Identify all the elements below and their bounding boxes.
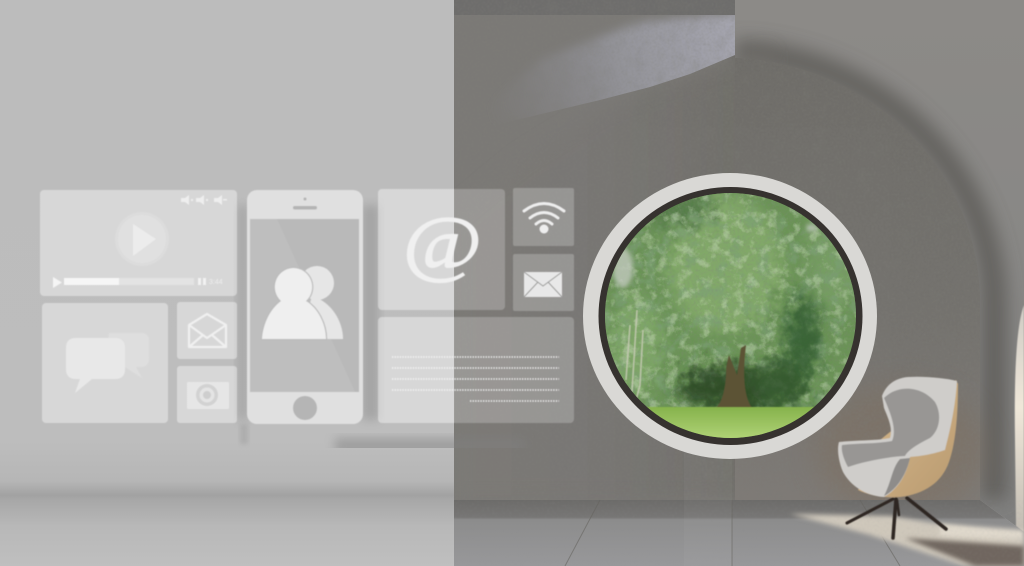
foliage dark clumps [600, 190, 862, 408]
arched wall, soft left part [684, 70, 735, 494]
bright wall strip [1015, 305, 1024, 532]
panel: chat [42, 303, 168, 423]
icon: wifi [524, 204, 564, 234]
time label: 3:44 [209, 279, 223, 286]
arched wall, crisp right part [735, 58, 980, 500]
panel: open mail [177, 302, 237, 359]
sunlight on floor [790, 514, 1024, 566]
progress bar [53, 277, 206, 288]
chair legs [847, 498, 946, 538]
garden view [600, 190, 863, 442]
panel: text block [378, 317, 574, 423]
sky gaps [613, 224, 818, 288]
chair upholstery [838, 377, 957, 497]
card shadows [236, 203, 454, 448]
panel: envelope [513, 254, 574, 311]
panel: smartphone [247, 190, 363, 424]
play button [115, 212, 169, 266]
screen reflection [250, 219, 355, 392]
window frame [598, 187, 862, 445]
chair back shadow [842, 389, 939, 467]
phone speaker [293, 198, 317, 210]
arch shadow [735, 52, 994, 500]
leaf grain [608, 200, 850, 406]
floor tile joints [565, 500, 900, 566]
panel: wifi [513, 188, 574, 246]
volume icons [181, 195, 227, 205]
icon: user group [262, 266, 343, 339]
foliage light clumps [600, 190, 862, 408]
understory shadow [676, 292, 819, 411]
panel: video player [40, 190, 237, 296]
window ring [583, 173, 877, 459]
icon: front speech bubble [66, 338, 125, 393]
phone screen [250, 219, 359, 392]
icon: camera [187, 382, 229, 409]
icon: open envelope [189, 314, 226, 347]
icon: at sign: @ [402, 202, 482, 285]
icon: back speech bubble [105, 333, 149, 378]
front user [262, 268, 326, 339]
upper wall base [454, 0, 735, 500]
floor shadow under panels [332, 435, 454, 448]
chair shell [858, 380, 958, 497]
ceiling band [454, 0, 735, 15]
foliage regions [609, 192, 863, 395]
wall grain [624, 15, 735, 86]
floor [454, 500, 1024, 566]
floor texture [454, 500, 1024, 566]
dotted text lines [392, 357, 559, 401]
home button [293, 396, 317, 420]
vaulted ceiling [735, 0, 1024, 532]
icon: closed envelope [524, 272, 562, 297]
translucent column [684, 450, 732, 566]
slender trunks [626, 310, 643, 400]
left grey overlay panel [0, 0, 454, 566]
photo: concrete room [454, 0, 1024, 566]
warm wall tint by chair [824, 401, 976, 500]
main tree trunk [716, 345, 752, 408]
armchair [838, 377, 958, 538]
back user [300, 266, 343, 339]
chair seat shadow [884, 458, 910, 496]
panel: camera [177, 366, 237, 423]
panel: email at sign [378, 189, 505, 310]
lawn [646, 406, 814, 438]
window [583, 173, 877, 459]
ceiling light patch [529, 15, 735, 113]
